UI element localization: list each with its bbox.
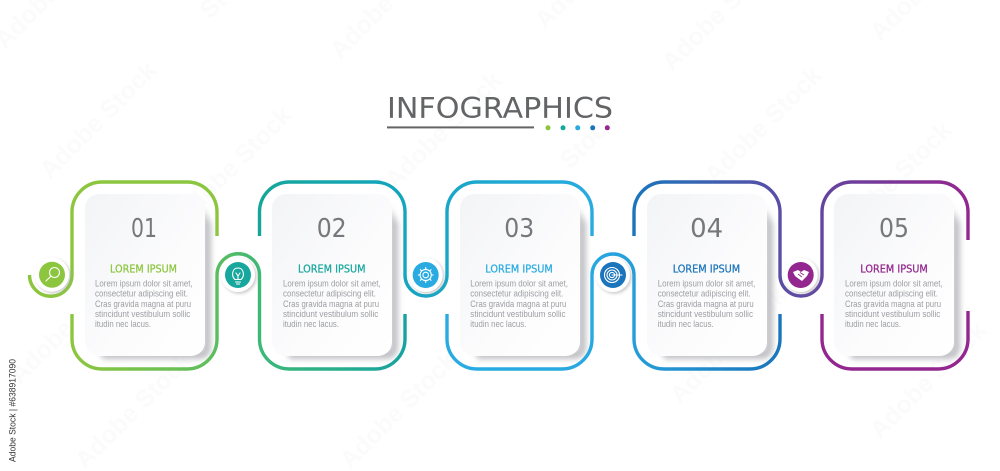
- body text: Cras gravida magna at puru: [95, 299, 191, 309]
- heading: LOREM IPSUM: [860, 264, 928, 276]
- connector line: card 04 top to card 05 top: [634, 182, 968, 296]
- watermark: Adobe: [4, 314, 79, 389]
- body text: stincidunt vestibulum sollic: [658, 309, 754, 319]
- body text: stincidunt vestibulum sollic: [845, 309, 941, 319]
- body text: Cras gravida magna at puru: [470, 299, 566, 309]
- body text: stincidunt vestibulum sollic: [470, 309, 566, 319]
- heading: LOREM IPSUM: [298, 264, 366, 276]
- title underline: [387, 126, 534, 128]
- title: [387, 91, 613, 130]
- body text: itudin nec lacus.: [283, 319, 339, 329]
- icon: gear: [409, 258, 443, 292]
- body text: Cras gravida magna at puru: [658, 299, 754, 309]
- card shadow: [661, 208, 773, 359]
- body text: itudin nec lacus.: [658, 319, 714, 329]
- card shadow: [286, 208, 398, 359]
- card body: [272, 194, 392, 356]
- watermark: Adobe Stock: [169, 101, 297, 229]
- title text: INFOGRAPHICS: [387, 91, 613, 125]
- heading: LOREM IPSUM: [673, 264, 740, 276]
- watermark: Adobe Stock: [69, 346, 197, 471]
- body text: Lorem ipsum dolor sit amet,: [845, 279, 943, 289]
- connector line: card 05 bottom: [822, 311, 968, 369]
- body text: [95, 279, 193, 329]
- body text: [283, 279, 381, 329]
- body text: consectetur adipiscing elit.: [95, 289, 188, 299]
- stock id caption: Adobe Stock | #638917090: [8, 359, 18, 462]
- title colour dots: [546, 125, 610, 130]
- number: 05: [879, 214, 909, 244]
- body text: [845, 279, 943, 329]
- card shadow: [848, 208, 960, 359]
- icon: target: [596, 258, 630, 292]
- heading: LOREM IPSUM: [485, 264, 553, 276]
- watermark: Adobe Stock: [864, 316, 992, 444]
- number: 01: [131, 214, 157, 244]
- connector line: card 02 top to card 03 top: [260, 182, 592, 296]
- watermark: Stock: [554, 106, 622, 174]
- body text: consectetur adipiscing elit.: [658, 289, 751, 299]
- body text: itudin nec lacus.: [845, 319, 901, 329]
- panel: card 02: [272, 194, 398, 359]
- watermark: Adobe Stock: [379, 66, 507, 194]
- connector line: card 01 bottom to card 02 bottom: [72, 254, 405, 369]
- body text: itudin nec lacus.: [95, 319, 151, 329]
- body text: Lorem ipsum dolor sit amet,: [95, 279, 193, 289]
- body text: consectetur adipiscing elit.: [845, 289, 938, 299]
- body text: consectetur adipiscing elit.: [283, 289, 376, 299]
- card body: [834, 194, 954, 356]
- body text: [470, 279, 568, 329]
- body text: [658, 279, 755, 329]
- body text: stincidunt vestibulum sollic: [283, 309, 379, 319]
- body text: Lorem ipsum dolor sit amet,: [658, 279, 755, 289]
- card shadow: [474, 208, 586, 359]
- body text: itudin nec lacus.: [470, 319, 526, 329]
- card body: [460, 194, 580, 356]
- connector line: card 03 bottom to card 04 bottom: [447, 254, 780, 369]
- body text: consectetur adipiscing elit.: [470, 289, 563, 299]
- watermark: Adobe Stock: [334, 346, 462, 471]
- watermark: Adobe Stock: [34, 56, 162, 184]
- body text: Cras gravida magna at puru: [283, 299, 379, 309]
- icon: light bulb: [221, 258, 255, 292]
- panel: card 03: [460, 194, 586, 359]
- card shadow: [99, 208, 211, 359]
- connector line: start to card 01 top: [30, 182, 217, 296]
- card body: [85, 194, 205, 356]
- panel: card 05: [834, 194, 960, 359]
- panel: card 04: [647, 194, 773, 359]
- watermark: Adobe Stock: [829, 116, 957, 244]
- body text: Lorem ipsum dolor sit amet,: [470, 279, 568, 289]
- number: 03: [504, 214, 534, 244]
- body text: Lorem ipsum dolor sit amet,: [283, 279, 381, 289]
- number: 02: [317, 214, 347, 244]
- watermark: Adobe Stock: [699, 61, 827, 189]
- card body: [647, 194, 767, 356]
- icon: magnifier: [35, 258, 69, 292]
- number: 04: [690, 214, 723, 244]
- heading: LOREM IPSUM: [110, 264, 177, 276]
- panel: card 01: [85, 194, 211, 359]
- icon: handshake: [784, 258, 818, 292]
- body text: Cras gravida magna at puru: [845, 299, 941, 309]
- watermark: Adobe Stock: [664, 281, 792, 409]
- body text: stincidunt vestibulum sollic: [95, 309, 191, 319]
